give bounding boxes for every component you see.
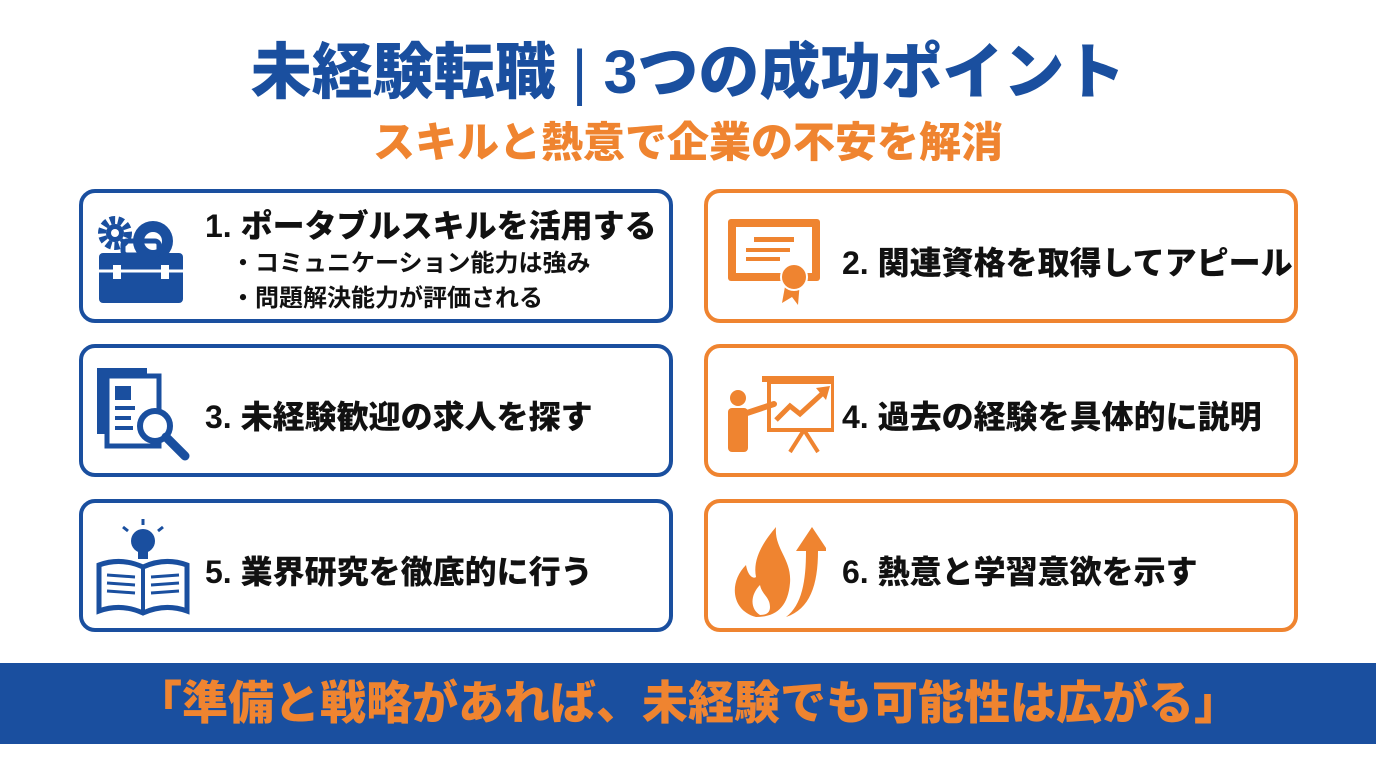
panel: 6 passion (704, 499, 1298, 632)
heading: 4. 過去の経験を具体的に説明 (842, 399, 1262, 435)
heading: 2. 関連資格を取得してアピール (842, 245, 1293, 281)
heading: 3. 未経験歓迎の求人を探す (205, 399, 593, 435)
icon: open book with bulb (96, 519, 190, 616)
bullets: ・コミュニケーション能力は強み (231, 250, 591, 277)
panel: 1 portable skills (79, 189, 673, 323)
title: 未経験転職 | 3つの成功ポイント (251, 38, 1125, 106)
heading: 5. 業界研究を徹底的に行う (205, 554, 593, 590)
panel: 2 qualifications (704, 189, 1298, 323)
subtitle: スキルと熱意で企業の不安を解消 (373, 119, 1003, 166)
bullets: ・問題解決能力が評価される (231, 285, 543, 312)
banner: closing message (0, 663, 1376, 744)
bullets (231, 250, 591, 312)
icon: documents with magnifier (97, 368, 190, 460)
panel: 4 explain experience (704, 344, 1298, 477)
heading: 1. ポータブルスキルを活用する (205, 208, 657, 244)
heading: 6. 熱意と学習意欲を示す (842, 554, 1198, 590)
panel: 3 job search (79, 344, 673, 477)
icon: flame with arrow (734, 527, 826, 617)
icon: certificate (728, 219, 820, 305)
banner: closing message: 「準備と戦略があれば、未経験でも可能性は広がる」 (136, 677, 1240, 729)
icon: presenter with chart (728, 376, 834, 454)
icon: toolbox with gears (98, 216, 183, 303)
panel: 5 industry research (79, 499, 673, 632)
